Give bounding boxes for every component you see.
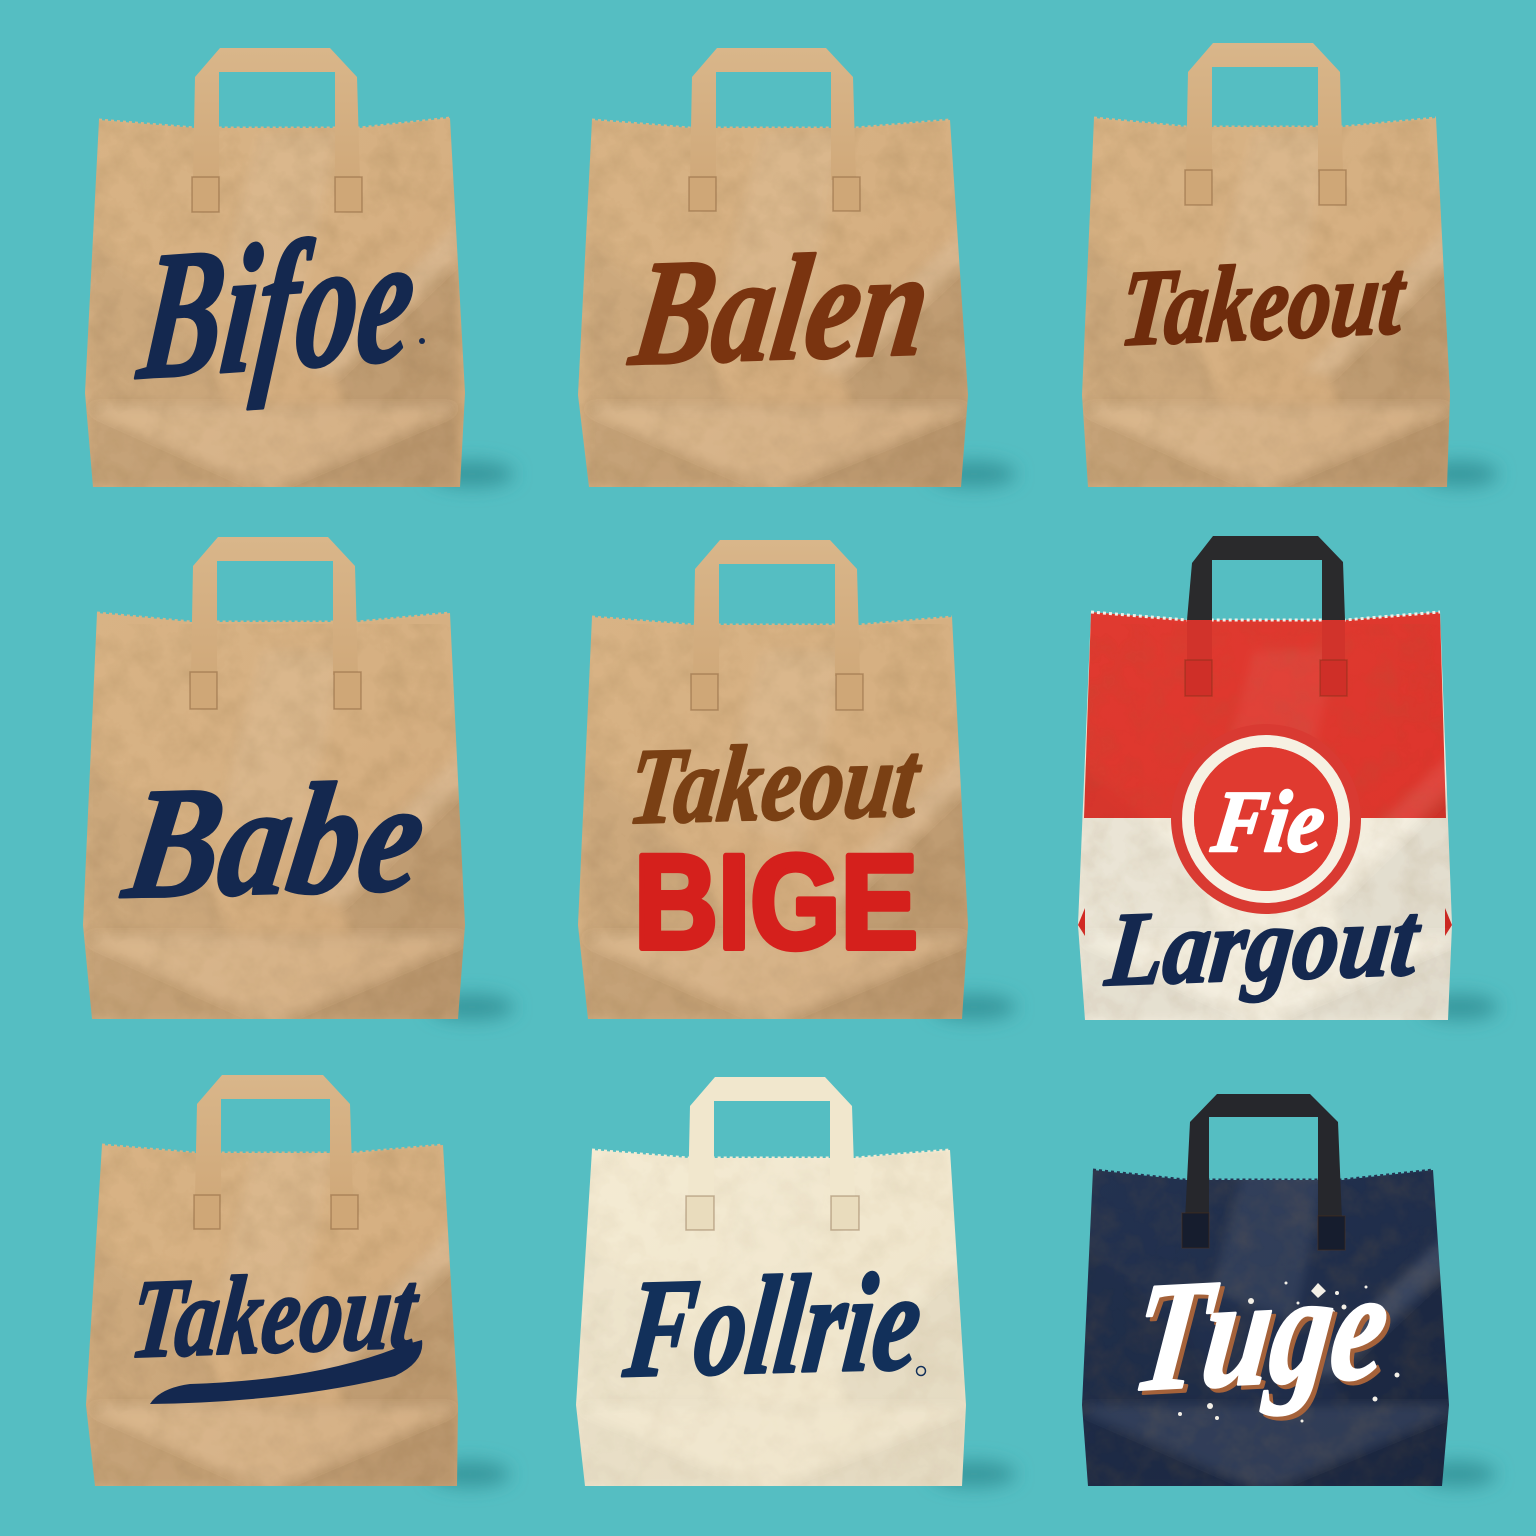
logo: BIGE: BIGE bbox=[634, 828, 918, 977]
logo: Takeout: Takeout bbox=[623, 720, 927, 847]
sparkle dots bbox=[1178, 1282, 1400, 1422]
badge: Fie circle: Fie bbox=[1206, 773, 1331, 871]
panel: bag Follrie bbox=[562, 1077, 1016, 1507]
registered mark bbox=[419, 338, 425, 344]
logo: Largout: Largout bbox=[1101, 880, 1426, 1008]
panel: bag red and cream bbox=[1063, 536, 1498, 1040]
logo: Balen: Balen bbox=[622, 219, 940, 397]
panel: bag Balen bbox=[569, 48, 1016, 507]
panel: bag Takeout swoosh bbox=[73, 1075, 510, 1507]
logo: Takeout: Takeout bbox=[125, 1248, 425, 1382]
panel: bag Tuge navy bbox=[1063, 1094, 1496, 1507]
panel: bag Takeout brown bbox=[1067, 43, 1498, 507]
swoosh underline bbox=[150, 1340, 422, 1404]
badge: Fie circle bbox=[1171, 724, 1361, 914]
panel: bag Bifoe bbox=[73, 48, 514, 507]
logo: Tuge: Tuge bbox=[1125, 1238, 1398, 1424]
panel: bag Takeout BIGE bbox=[566, 540, 1016, 1040]
logo: Bifoe: Bifoe bbox=[130, 196, 425, 418]
logo: Tuge shadow: Tuge bbox=[1129, 1242, 1402, 1428]
logo: Takeout: Takeout bbox=[1116, 237, 1411, 369]
panel: bag Babe bbox=[68, 537, 514, 1040]
logo: Babe: Babe bbox=[114, 749, 436, 932]
registered mark bbox=[916, 1366, 926, 1376]
logo: Follrie: Follrie bbox=[618, 1245, 929, 1407]
